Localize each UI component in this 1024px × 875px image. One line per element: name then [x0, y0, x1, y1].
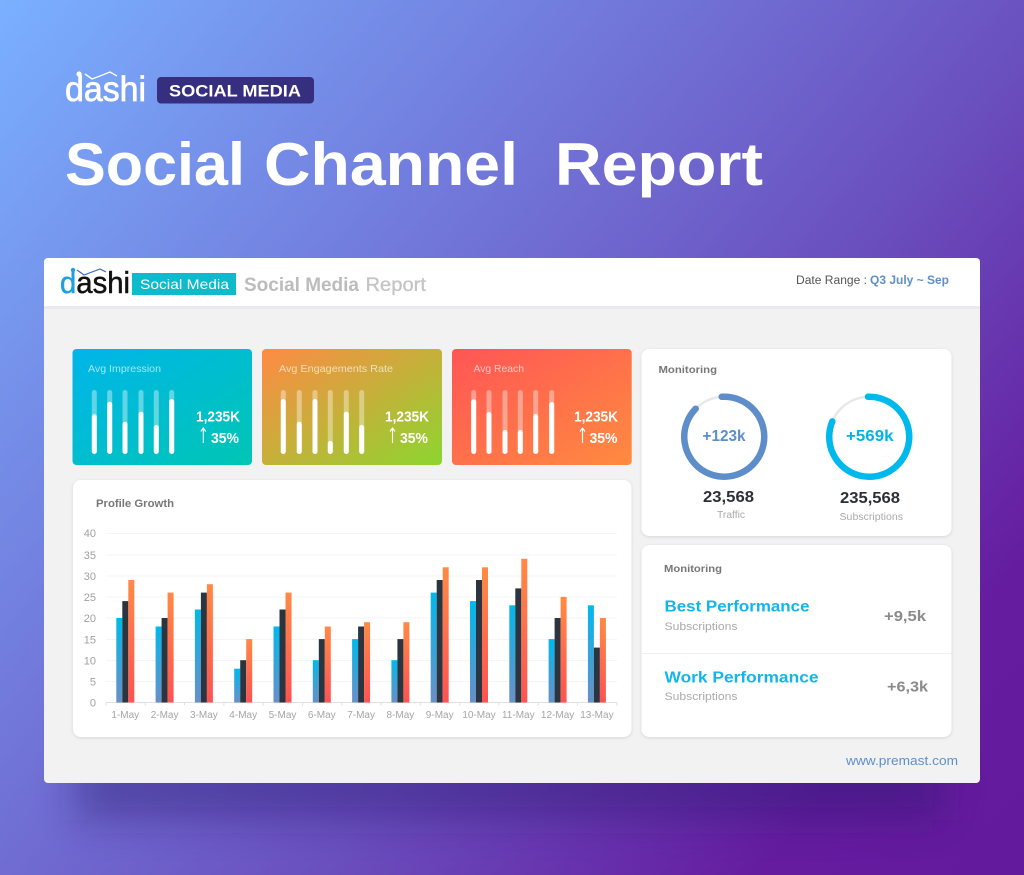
- card: avg impression: [72, 349, 252, 465]
- header title: Social Media: [244, 275, 359, 296]
- panel: monitoring performance: [642, 545, 952, 737]
- card: avg engagements rate: 1,235K: [385, 410, 429, 426]
- mini bars: [281, 390, 364, 454]
- ring: subscriptions: 235,568: [840, 490, 900, 507]
- x axis labels: 7-May: [347, 710, 375, 721]
- x axis labels: 8-May: [387, 710, 414, 721]
- card: avg engagements rate: Avg Engagements Rate: [279, 363, 393, 375]
- logo: dashi white: dashi: [65, 70, 146, 109]
- title: Report: [555, 131, 763, 198]
- row: best performance: Subscriptions: [664, 621, 738, 633]
- badge: social media: SOCIAL MEDIA: [169, 82, 301, 100]
- row: work performance: +6,3k: [887, 678, 929, 696]
- row: work performance: [664, 670, 929, 703]
- panel: monitoring rings: Monitoring: [658, 364, 717, 376]
- y axis labels: 5: [90, 676, 96, 688]
- header title: Report: [366, 275, 427, 296]
- x axis labels: 13-May: [580, 710, 614, 721]
- x axis labels: 10-May: [462, 710, 496, 721]
- y axis labels: 20: [84, 613, 96, 625]
- x axis labels: [111, 710, 614, 721]
- x axis labels: 9-May: [426, 710, 454, 721]
- arrow up: [201, 428, 206, 443]
- date range: Q3 July ~ Sep: [870, 275, 949, 287]
- ring: traffic: 23,568: [703, 489, 754, 506]
- y axis labels: 30: [84, 571, 96, 583]
- ring: subscriptions: Subscriptions: [840, 512, 903, 523]
- x axis labels: 12-May: [541, 710, 574, 721]
- y axis labels: 0: [90, 698, 96, 710]
- x axis labels: 3-May: [190, 710, 218, 721]
- row: best performance: [664, 598, 927, 633]
- row: best performance: +9,5k: [884, 608, 927, 625]
- card: avg reach: 35%: [590, 431, 618, 447]
- mini bars: [92, 390, 174, 454]
- panel: profile growth: Profile Growth: [96, 498, 174, 510]
- row: work performance: Subscriptions: [664, 691, 738, 703]
- panel: monitoring performance: Monitoring: [664, 563, 722, 575]
- arrow up: [390, 428, 395, 443]
- panel: monitoring rings: [642, 349, 952, 536]
- badge: social media: [157, 77, 314, 104]
- date range: [796, 275, 949, 287]
- ring: traffic: Traffic: [717, 510, 745, 521]
- card: avg engagements rate: [262, 349, 442, 465]
- x axis labels: 11-May: [502, 710, 535, 721]
- card: avg impression: 1,235K: [196, 410, 240, 426]
- top brand row: [65, 70, 314, 109]
- title: Social: [65, 131, 245, 198]
- dashboard panel: [44, 258, 980, 783]
- x axis labels: 2-May: [151, 710, 178, 721]
- y axis labels: 25: [84, 592, 96, 604]
- x axis labels: 6-May: [308, 710, 336, 721]
- logo: dashi colour: dashi: [60, 265, 130, 300]
- date range: Date Range :: [796, 275, 867, 287]
- card: avg reach: Avg Reach: [474, 363, 524, 375]
- header badge: [132, 273, 236, 295]
- x axis labels: 4-May: [229, 710, 257, 721]
- dashboard header: [44, 258, 980, 309]
- ring: subscriptions: [829, 397, 909, 523]
- y axis labels: 15: [84, 634, 96, 646]
- header badge: Social Media: [140, 276, 229, 292]
- x axis labels: 1-May: [111, 710, 139, 721]
- row: work performance: Work Performance: [664, 670, 819, 686]
- dashboard drop shadow: [75, 755, 945, 820]
- x axis labels: 5-May: [269, 710, 296, 721]
- y axis labels: 40: [84, 528, 96, 540]
- footer url: www.premast.com: [845, 754, 958, 768]
- bar chart: [116, 559, 606, 702]
- card: avg reach: [452, 349, 632, 465]
- y axis labels: 35: [84, 550, 96, 562]
- row: best performance: Best Performance: [664, 598, 810, 616]
- card: avg impression: 35%: [211, 431, 239, 447]
- y axis labels: [84, 528, 96, 710]
- arrow up: [580, 428, 585, 443]
- panel: profile growth: [73, 480, 632, 737]
- card: avg reach: 1,235K: [574, 410, 618, 426]
- card: avg engagements rate: 35%: [400, 431, 428, 447]
- title: Channel: [264, 131, 518, 198]
- y axis labels: 10: [84, 656, 96, 668]
- ring: traffic: +123k: [702, 428, 746, 445]
- header title: [244, 275, 427, 296]
- title: [65, 131, 763, 198]
- card: avg impression: Avg Impression: [88, 363, 161, 375]
- mini bars: [471, 390, 554, 454]
- ring: traffic: [684, 397, 764, 521]
- ring: subscriptions: +569k: [846, 428, 894, 445]
